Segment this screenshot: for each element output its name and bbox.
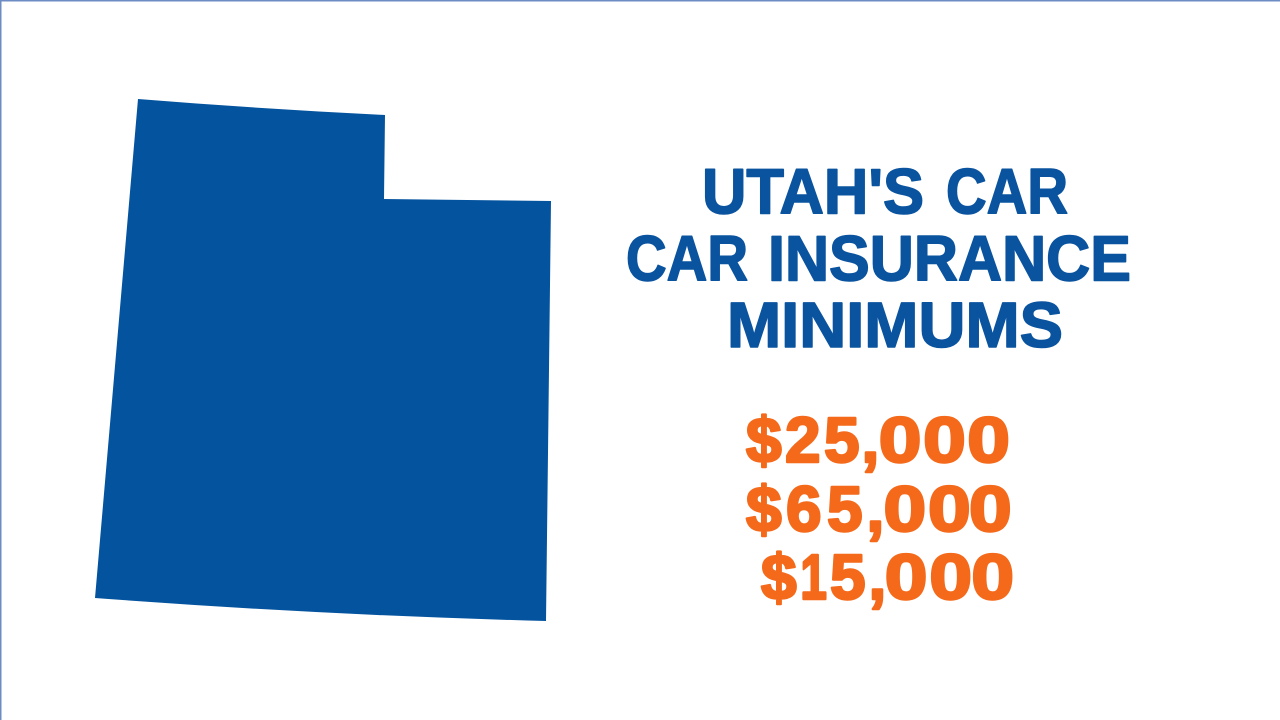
amount: $15,000: 1 — [800, 541, 827, 613]
icon: Utah state map silhouette — [95, 99, 551, 621]
amount: $15,000: 000 — [885, 541, 1014, 613]
title line 2: INSURANCE — [768, 222, 1131, 294]
amount: $65,000 — [746, 473, 1012, 545]
title line 2 — [626, 222, 1131, 294]
coverage minimum amounts — [746, 404, 1014, 613]
amount: $25,000 — [746, 404, 1010, 476]
amount: $15,000: 5, — [830, 541, 886, 613]
title line 1: CAR — [946, 156, 1068, 228]
title line 1: UTAH'S — [702, 156, 924, 228]
amount: $65,000: $65, — [746, 473, 884, 545]
amount: $15,000 — [761, 541, 1014, 613]
title line 1 — [702, 156, 1068, 228]
amount: $65,000: 000 — [884, 473, 1012, 545]
title: Utah's car car insurance minimums — [626, 156, 1131, 361]
title line 3: MINIMUMS — [727, 289, 1063, 361]
title line 2: CAR — [626, 222, 748, 294]
amount: $25,000: $25, — [746, 404, 879, 476]
amount: $25,000: 000 — [879, 404, 1010, 476]
amount: $15,000: $ — [761, 541, 797, 613]
